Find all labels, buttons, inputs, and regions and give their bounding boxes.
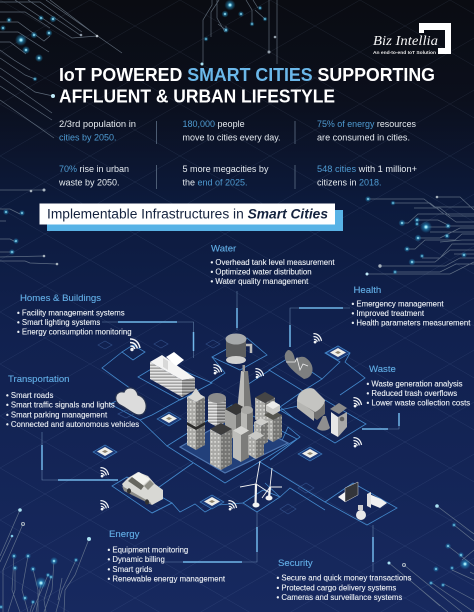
icon: car xyxy=(122,472,163,505)
text block: waste xyxy=(366,364,470,408)
list: energy: • Smart grids xyxy=(108,565,152,574)
tower: front centre xyxy=(233,426,249,462)
circuit: top centre xyxy=(200,0,277,66)
tower: round top xyxy=(241,406,253,439)
tower: middle block xyxy=(225,403,247,440)
tower: front right xyxy=(248,431,264,459)
connector: homes xyxy=(102,322,194,358)
connector highlight: waste xyxy=(362,413,399,429)
tower: small block xyxy=(254,418,268,446)
text block: health xyxy=(352,285,471,328)
heading: waste: Waste xyxy=(369,364,396,375)
list: homes and buildings: • Energy consumption monitoring xyxy=(17,328,132,336)
icon: wind turbines xyxy=(240,461,282,508)
connector: waste xyxy=(362,413,399,429)
list: health: • Improved treatment xyxy=(352,309,425,318)
circuit: bottom right xyxy=(388,504,474,612)
list: water: • Optimized water distribution xyxy=(210,268,312,276)
tower: back right xyxy=(255,392,275,425)
circuit: top left xyxy=(0,0,122,138)
banner heading: Implementable Infrastructures in Smart Cities xyxy=(47,206,328,222)
heading: water: Water xyxy=(211,244,237,254)
list: energy: • Dynamic billing xyxy=(108,555,165,564)
stat: population: 2/3rd population in xyxy=(59,119,136,129)
icon: security devices xyxy=(338,482,387,520)
circuit: bottom left xyxy=(0,508,91,612)
list: security: • Protected cargo delivery systems xyxy=(276,584,396,592)
list: energy: • Equipment monitoring xyxy=(108,546,188,554)
tower: right block xyxy=(264,401,282,442)
statistics grid xyxy=(58,119,417,189)
connector: security xyxy=(372,525,374,572)
tower: striped xyxy=(208,393,226,427)
title: IoT POWERED SMART CITIES SUPPORTING xyxy=(59,64,435,85)
network lines xyxy=(98,338,397,525)
connector highlight: health xyxy=(290,308,343,347)
stat: million cities line two: citizens in 2018. xyxy=(317,178,382,188)
title xyxy=(59,64,435,106)
connector: transportation xyxy=(42,432,118,480)
list: health: • Emergency management xyxy=(352,300,444,308)
list: water: • Overhead tank level measurement xyxy=(210,258,335,267)
heading: security: Security xyxy=(278,558,313,569)
list: health: • Health parameters measurement xyxy=(352,318,471,328)
list: transportation: • Smart traffic signals and lights xyxy=(6,400,115,410)
logo wordmark: Biz Intellia xyxy=(373,34,438,49)
banner: implementable infrastructures xyxy=(40,204,343,231)
list: transportation: • Smart roads xyxy=(6,391,53,400)
list: waste: • Reduced trash overflows xyxy=(366,389,457,398)
connector: water xyxy=(236,291,238,330)
stat: megacities: 5 more megacities by xyxy=(182,164,269,174)
connector highlight: homes xyxy=(118,322,194,351)
stat: waste line two: waste by 2050. xyxy=(58,178,120,188)
stat: people line two: move to cities every day. xyxy=(182,132,280,142)
icon: cloud xyxy=(116,388,146,415)
tower: front large xyxy=(210,423,232,470)
wifi icons xyxy=(100,334,362,511)
icon: heart xyxy=(285,350,313,379)
text block: homes and buildings xyxy=(17,293,132,336)
heading: homes and buildings: Homes & Buildings xyxy=(20,293,101,304)
text block: security xyxy=(276,558,412,602)
list: homes and buildings: • Smart lighting systems xyxy=(17,318,100,327)
connector highlight: transportation xyxy=(42,445,118,480)
circuit: left middle xyxy=(0,188,58,265)
heading: energy: Energy xyxy=(109,529,140,540)
connector highlight: security xyxy=(372,537,374,562)
connector highlight: water xyxy=(236,308,238,328)
logo tagline: An end-to-end IoT Solution xyxy=(373,50,436,55)
text block: transportation xyxy=(6,374,139,429)
connector highlight: energy xyxy=(183,527,257,562)
city platform xyxy=(180,416,288,473)
heading: health: Health xyxy=(354,285,381,296)
stat: energy line two: are consumed in cities. xyxy=(317,132,410,142)
list: waste: • Waste generation analysis xyxy=(366,380,463,388)
text block: water xyxy=(210,244,335,286)
list: security: • Secure and quick money transactions xyxy=(276,574,412,582)
stat: energy: 75% of energy resources xyxy=(317,119,416,129)
list: homes and buildings: • Facility management systems xyxy=(17,308,125,318)
icon: waste bin xyxy=(297,388,347,437)
stat: million cities: 548 cities with 1 million+ xyxy=(317,164,417,174)
icon: recycling can xyxy=(330,403,347,437)
connector: energy xyxy=(165,512,257,562)
tower: corner with spire xyxy=(187,388,205,450)
circuit: right upper xyxy=(365,196,474,276)
list: water: • Water quality management xyxy=(210,277,309,286)
stat: population line two: cities by 2050. xyxy=(59,132,117,142)
list: security: • Cameras and surveillance systems xyxy=(276,593,402,602)
icon: office building xyxy=(150,352,195,397)
tower: spire xyxy=(237,365,252,412)
list: waste: • Lower waste collection costs xyxy=(366,398,470,408)
logo bracket xyxy=(419,23,451,54)
icon: rubbish bag xyxy=(317,416,330,431)
chips xyxy=(93,346,350,509)
icon: water tank xyxy=(226,334,251,364)
stat: megacities line two: the end of 2025. xyxy=(182,178,248,188)
connector: health xyxy=(290,308,350,347)
list: transportation: • Connected and autonomous vehicles xyxy=(6,420,139,429)
city towers xyxy=(187,365,282,470)
heading: transportation: Transportation xyxy=(8,374,70,385)
list: transportation: • Smart parking management xyxy=(6,410,108,420)
stat: waste: 70% rise in urban xyxy=(59,164,129,174)
text block: energy xyxy=(108,529,226,584)
logo xyxy=(373,23,451,55)
list: energy: • Renewable energy management xyxy=(108,574,226,584)
stat: people: 180,000 people xyxy=(182,119,245,129)
title: AFFLUENT & URBAN LIFESTYLE xyxy=(59,86,335,106)
